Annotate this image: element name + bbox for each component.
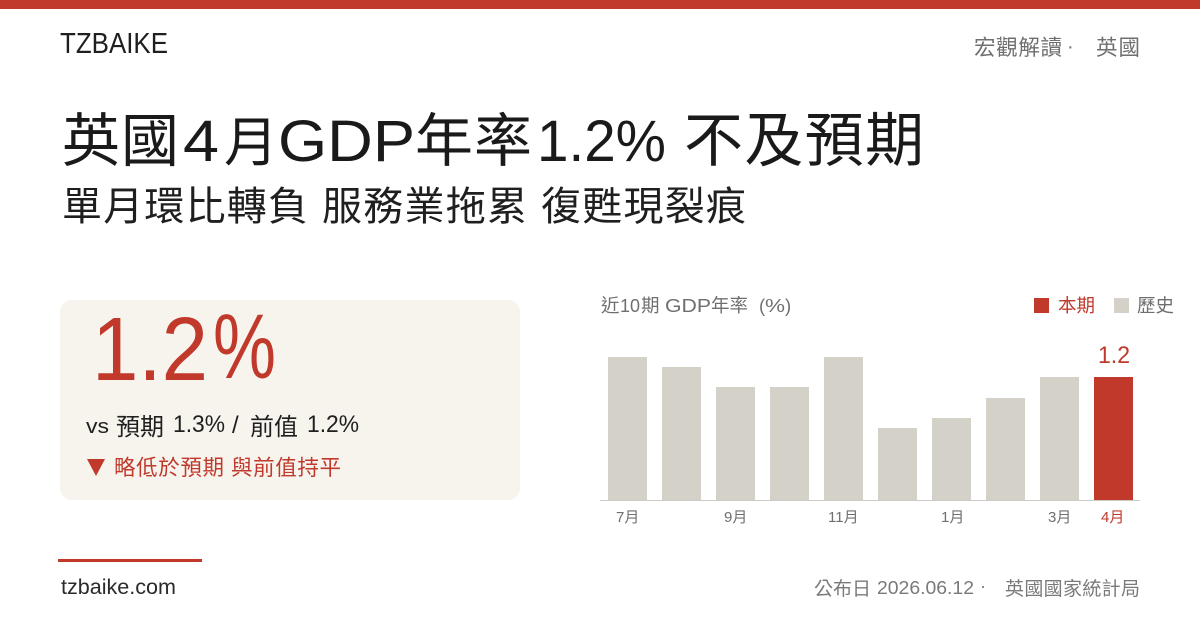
brand logo: TZBAIKE bbox=[60, 28, 168, 60]
chart heading: % bbox=[765, 295, 785, 316]
axis labels: 4月 bbox=[1101, 509, 1124, 526]
status note: 與前值持平 bbox=[231, 456, 341, 480]
big number: % bbox=[213, 296, 276, 398]
chart heading: ( bbox=[759, 295, 766, 316]
title: 英國 bbox=[62, 109, 179, 174]
title: GDP bbox=[278, 109, 415, 174]
footer source: · bbox=[980, 576, 986, 596]
current value label: 1.2 bbox=[1098, 342, 1130, 369]
title: 4 bbox=[183, 109, 219, 174]
big number: 1.2 bbox=[92, 300, 208, 400]
subtitle: 單月環比轉負 bbox=[62, 185, 308, 229]
title: 不及預期 bbox=[684, 108, 924, 174]
legend: 本期 bbox=[1058, 295, 1095, 316]
top accent bar bbox=[0, 0, 1200, 9]
legend: 歷史 bbox=[1137, 295, 1174, 316]
chart heading: 近 bbox=[601, 295, 620, 316]
section tag: 宏觀解讀 bbox=[974, 36, 1062, 60]
chart heading bbox=[601, 295, 791, 316]
chart heading: GDP bbox=[665, 295, 711, 316]
title: 月 bbox=[224, 113, 278, 173]
status note: 略低於預期 bbox=[114, 456, 224, 480]
legend bbox=[1034, 295, 1174, 316]
panel: key figure bbox=[60, 296, 520, 500]
title: 年率 bbox=[415, 109, 532, 174]
bar chart bbox=[600, 342, 1140, 526]
chart heading: 年率 bbox=[711, 295, 748, 316]
footer source bbox=[814, 576, 1140, 600]
comparison line: 預期 bbox=[116, 414, 164, 441]
axis labels: 7月 bbox=[616, 509, 639, 526]
section tag: 英國 bbox=[1096, 36, 1140, 60]
footer site: tzbaike.com bbox=[61, 576, 176, 599]
big number bbox=[92, 296, 276, 400]
comparison line: 前值 bbox=[250, 414, 298, 441]
panel background bbox=[60, 300, 520, 500]
comparison line: 1.3% bbox=[173, 411, 225, 438]
axis labels: 9月 bbox=[724, 509, 747, 526]
axis labels bbox=[616, 509, 1124, 526]
comparison line bbox=[86, 411, 359, 441]
subtitle bbox=[62, 185, 746, 229]
chart heading: 10 bbox=[620, 295, 640, 316]
footer source: 2026.06.12 bbox=[877, 578, 974, 598]
subtitle: 復甦現裂痕 bbox=[541, 185, 746, 229]
status note bbox=[87, 456, 341, 480]
footer source: 英國國家統計局 bbox=[1005, 578, 1140, 600]
comparison line: vs bbox=[86, 416, 109, 438]
title bbox=[62, 108, 924, 174]
footer accent line bbox=[58, 559, 202, 562]
axis labels: 1月 bbox=[941, 509, 964, 526]
section tag: · bbox=[1067, 36, 1074, 58]
footer source: 公布日 bbox=[814, 578, 871, 600]
axis labels: 11月 bbox=[828, 509, 859, 526]
chart heading: ) bbox=[785, 295, 791, 316]
subtitle: 服務業拖累 bbox=[322, 185, 527, 229]
comparison line: / bbox=[232, 412, 239, 439]
comparison line: 1.2% bbox=[307, 411, 359, 438]
title: 1.2% bbox=[537, 109, 666, 174]
section tag bbox=[974, 36, 1140, 60]
axis labels: 3月 bbox=[1048, 509, 1071, 526]
chart heading: 期 bbox=[641, 295, 660, 316]
